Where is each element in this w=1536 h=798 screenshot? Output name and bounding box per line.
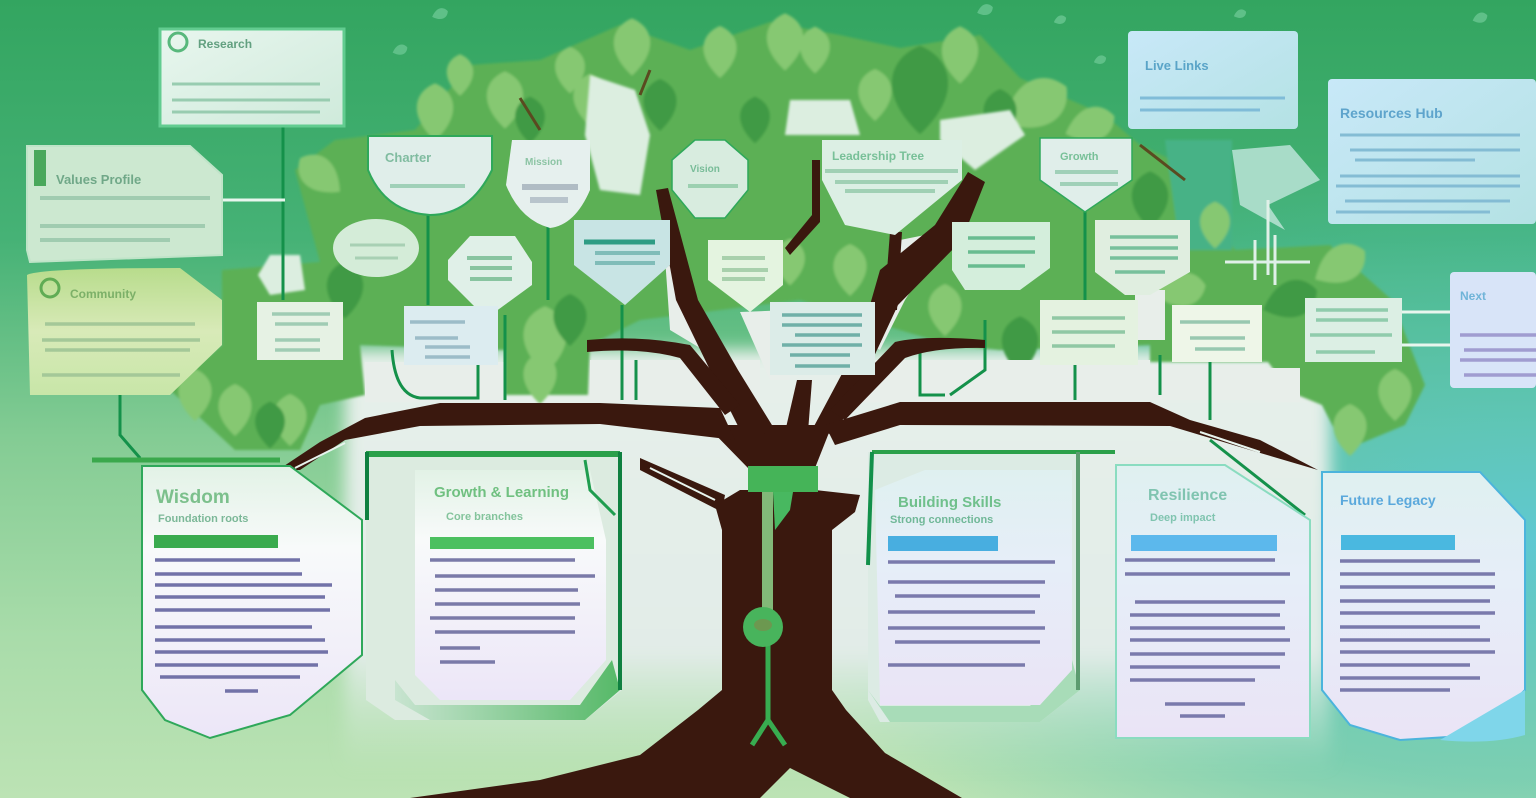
body text <box>1460 335 1536 375</box>
green diagonal accent <box>585 460 615 515</box>
body text <box>42 324 200 375</box>
shield bubble upper right: Growth <box>1060 151 1099 163</box>
body text <box>1336 135 1520 212</box>
small card 1 <box>257 302 343 360</box>
top-right panel <box>1128 31 1298 129</box>
icon: badge <box>169 33 187 51</box>
heading: Resources Hub <box>1340 105 1443 121</box>
accent bar <box>1131 535 1277 551</box>
medallion <box>743 607 783 647</box>
right edge panel <box>1450 272 1536 388</box>
pale glow behind trunk and lower panels <box>345 350 1330 770</box>
top shield bubble: Charter <box>385 150 431 165</box>
teal shield bubble <box>574 220 670 305</box>
right big branch <box>812 172 985 435</box>
small card 3 <box>770 302 875 375</box>
heading: Resilience <box>1148 487 1227 504</box>
body text <box>1340 561 1495 690</box>
bottom panel 1 <box>142 466 362 738</box>
pale tree sketch, right <box>1225 145 1320 285</box>
accent bar <box>154 535 278 548</box>
wide shield bubble: Leadership Tree <box>832 149 924 163</box>
floating leaves along the top edge <box>391 2 1489 66</box>
left panel lower <box>27 268 222 395</box>
round bubble left: Mission <box>525 157 562 168</box>
bottom panel 1: Foundation roots <box>158 513 248 525</box>
icon: bar <box>34 150 46 186</box>
shield bubble upper right <box>1040 138 1132 212</box>
round bubble center: Vision <box>690 164 720 175</box>
small card 5 <box>1172 305 1262 362</box>
top shield bubble <box>368 136 492 215</box>
bottom panel 4: Deep impact <box>1150 512 1216 524</box>
tree trunk and branches <box>278 160 1318 798</box>
card right a <box>952 222 1050 290</box>
bottom panel 5 <box>1322 472 1525 742</box>
bottom panel 2: Core branches <box>446 511 523 523</box>
sprout leaf <box>773 492 793 530</box>
heading: Next <box>1460 289 1486 303</box>
small card 4 <box>1040 300 1138 365</box>
tree canopy foliage <box>170 13 1425 456</box>
trunk connector: green badge <box>743 466 818 745</box>
bottom panel 4 <box>1116 465 1310 738</box>
body text <box>1125 560 1290 716</box>
pale leaf clusters at the crown <box>258 75 1025 295</box>
heading: Values Profile <box>56 172 141 187</box>
heading: Live Links <box>1145 58 1209 73</box>
center stub <box>785 380 812 432</box>
left big branch <box>656 188 775 440</box>
accent bar <box>888 536 998 551</box>
small card 2 <box>404 306 498 365</box>
oval bubble left <box>333 219 419 277</box>
round bubble middle <box>448 236 532 312</box>
wide shield bubble <box>822 140 962 235</box>
bottom panel 2 <box>366 452 622 720</box>
small card 6 <box>1305 298 1402 362</box>
body text <box>155 560 332 691</box>
lower left diagonal branch <box>640 458 725 512</box>
vertical twig <box>884 232 902 310</box>
left main branch <box>278 403 735 470</box>
heading: Research <box>198 37 252 51</box>
upper left arm <box>587 338 740 415</box>
heading: Wisdom <box>156 487 230 508</box>
round bubble left <box>506 140 590 228</box>
bottom panel 3: Strong connections <box>890 514 993 526</box>
heading: Future Legacy <box>1340 492 1436 508</box>
pale bubble center <box>708 240 783 312</box>
body text <box>40 198 210 240</box>
heading: Growth & Learning <box>434 484 569 501</box>
far-right panel <box>1328 79 1536 224</box>
round bubble center <box>672 140 748 218</box>
card right b <box>1095 220 1190 295</box>
accent bar <box>1341 535 1455 550</box>
body text <box>1140 98 1285 110</box>
accent bar <box>430 537 594 549</box>
icon: ring <box>41 279 59 297</box>
body text <box>430 560 595 662</box>
right main branch <box>825 402 1318 470</box>
left panel upper <box>27 146 222 262</box>
body text <box>888 562 1055 665</box>
bottom panel 3 <box>868 452 1115 722</box>
trunk <box>410 425 962 798</box>
pale under-canopy gaps between branches <box>365 215 1300 402</box>
heading: Community <box>70 287 136 301</box>
sprout stem <box>752 640 785 745</box>
top-left panel <box>160 29 344 126</box>
center twig <box>785 160 820 255</box>
body text <box>172 84 330 112</box>
heading: Building Skills <box>898 494 1001 511</box>
green connector lines <box>92 126 1305 515</box>
upper right arm <box>830 338 985 420</box>
